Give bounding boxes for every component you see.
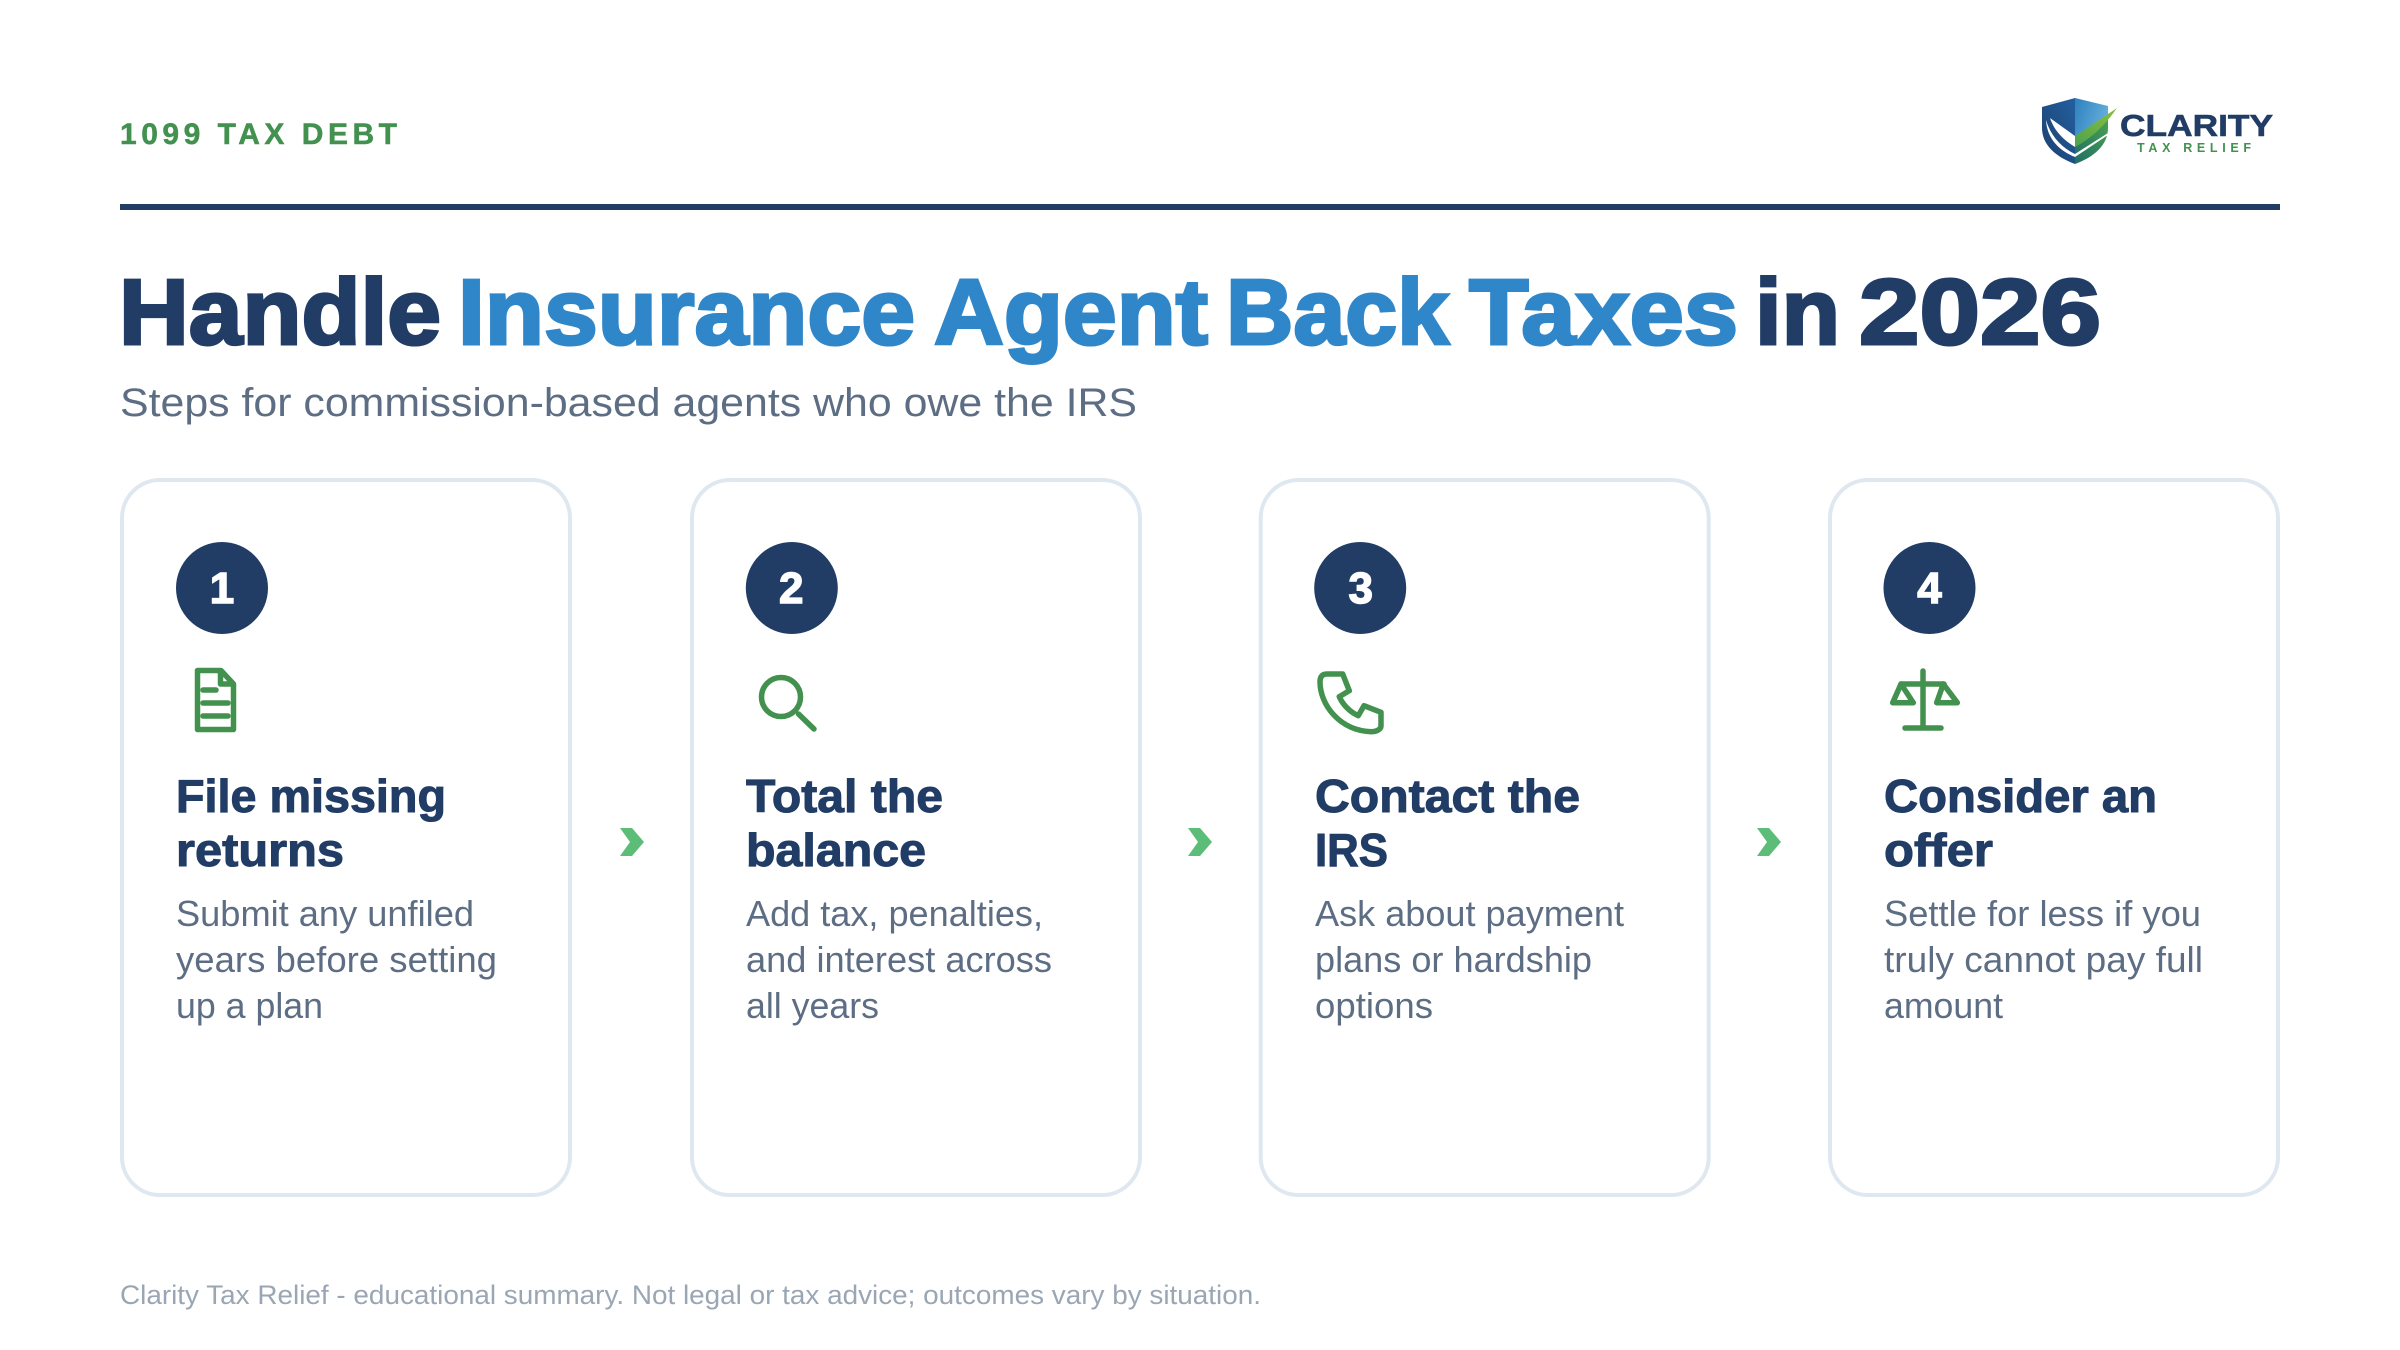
step description: all years	[746, 985, 879, 1026]
panel: step 1	[122, 480, 570, 1195]
step description: years before setting	[176, 939, 497, 980]
step heading	[176, 770, 446, 876]
arrow 2 to 3	[1188, 828, 1212, 856]
step description: options	[1315, 985, 1433, 1026]
card frame	[692, 480, 1140, 1195]
step description: Submit any unfiled	[176, 893, 474, 934]
step description: and interest across	[746, 939, 1052, 980]
step description: up a plan	[176, 985, 323, 1026]
logo wordmark: CLARITY	[2120, 108, 2273, 143]
step description: Ask about payment	[1315, 893, 1624, 934]
card frame	[1830, 480, 2278, 1195]
title: 2026	[1859, 260, 2101, 364]
number badge 4: 4	[1917, 564, 1942, 613]
header rule	[120, 204, 2280, 210]
icon: magnifying glass	[762, 678, 814, 729]
title: Handle	[119, 260, 441, 364]
logo tagline: TAX RELIEF	[2137, 141, 2251, 155]
step heading: balance	[746, 824, 926, 876]
footer disclaimer: Clarity Tax Relief - educational summary. Not legal or tax advice; outcomes vary by situation.	[120, 1280, 1261, 1310]
step heading: Total the	[746, 770, 943, 822]
step description: Add tax, penalties,	[746, 893, 1043, 934]
icon: document	[198, 670, 234, 730]
eyebrow label: 1099 TAX DEBT	[120, 118, 397, 151]
logo: Clarity Tax Relief	[2042, 98, 2273, 164]
card frame	[122, 480, 570, 1195]
number badge 4	[1884, 542, 1976, 634]
title	[119, 260, 2101, 364]
icon: balance scale	[1893, 671, 1957, 728]
step description: Settle for less if you	[1884, 893, 2201, 934]
step description	[176, 893, 497, 1026]
step heading: Contact the	[1315, 770, 1580, 822]
step heading	[1884, 770, 2157, 876]
step description	[1884, 893, 2203, 1026]
step description: truly cannot pay full	[1884, 939, 2203, 980]
arrow 1 to 2	[620, 828, 644, 856]
step description: amount	[1884, 985, 2003, 1026]
step description	[1315, 893, 1624, 1026]
step heading	[746, 770, 943, 876]
step heading: File missing	[176, 770, 446, 822]
number badge 1	[176, 542, 268, 634]
panel: step 3	[1261, 480, 1709, 1195]
step heading: returns	[176, 824, 344, 876]
number badge 2: 2	[779, 564, 804, 613]
number badge 1: 1	[210, 564, 234, 613]
step description	[746, 893, 1052, 1026]
panel: step 2	[692, 480, 1140, 1195]
step heading: offer	[1884, 824, 1993, 876]
arrow 3 to 4	[1757, 828, 1781, 856]
number badge 3	[1314, 542, 1406, 634]
title: Back	[1226, 260, 1449, 364]
icon: phone	[1320, 674, 1381, 732]
title: in	[1755, 260, 1840, 364]
number badge 3: 3	[1348, 564, 1373, 613]
title: Agent	[934, 260, 1208, 364]
step heading: Consider an	[1884, 770, 2157, 822]
icon: shield with check mark	[2042, 98, 2117, 164]
panel: step 4	[1830, 480, 2278, 1195]
number badge 2	[746, 542, 838, 634]
title: Taxes	[1469, 260, 1738, 364]
title: Insurance	[458, 260, 915, 364]
subtitle: Steps for commission-based agents who owe the IRS	[120, 381, 1137, 425]
step heading: IRS	[1315, 824, 1388, 876]
card frame	[1261, 480, 1709, 1195]
step heading	[1315, 770, 1580, 876]
step description: plans or hardship	[1315, 939, 1592, 980]
